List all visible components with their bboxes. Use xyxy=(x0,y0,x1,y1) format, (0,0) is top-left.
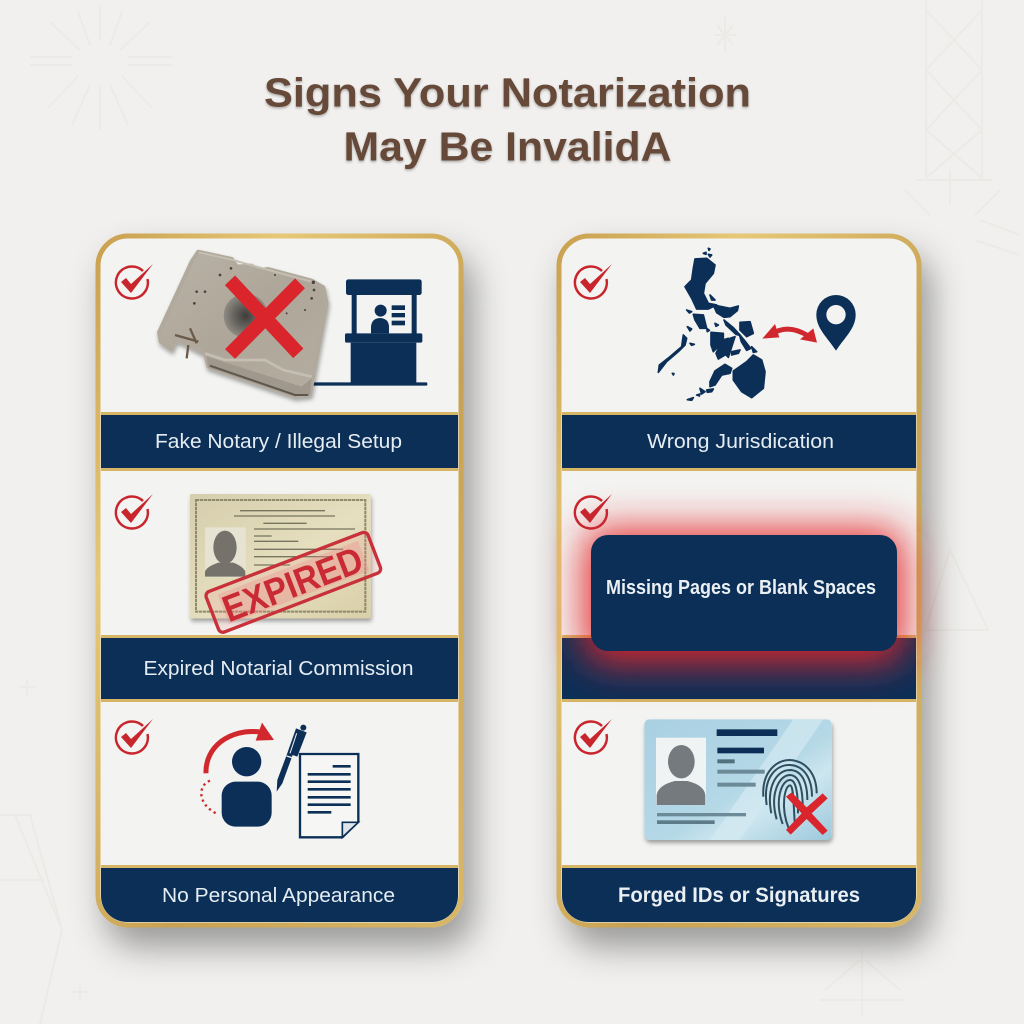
label: expired commission: Expired Notarial Commission xyxy=(144,658,414,680)
icon: Philippines map xyxy=(658,248,765,400)
icon: expired certificate: EXPIRED xyxy=(217,538,369,630)
callout: missing pages: Missing Pages or Blank Spaces xyxy=(606,577,876,599)
panel: left column xyxy=(98,236,461,925)
icon: damaged fake seal with red X xyxy=(159,252,327,397)
icon: expired certificate xyxy=(190,494,382,634)
icon: check mark 5 xyxy=(575,494,612,529)
card label strips xyxy=(562,412,916,922)
red glow behind callout xyxy=(585,530,903,662)
icon: check mark 4 xyxy=(575,264,612,299)
icon: person, pen and document xyxy=(201,723,358,837)
title xyxy=(264,70,751,170)
icon: ID card with forged fingerprint xyxy=(644,719,832,840)
title: Signs Your Notarization xyxy=(264,70,751,116)
icon: notary booth xyxy=(312,279,427,386)
label: forged IDs: Forged IDs or Signatures xyxy=(618,884,860,907)
icon: check mark 1 xyxy=(116,264,153,299)
card label strips xyxy=(101,412,458,922)
icon: check mark 2 xyxy=(116,494,153,529)
icon: check mark 6 xyxy=(575,719,612,754)
icon: check mark 3 xyxy=(116,719,153,754)
card frame xyxy=(559,236,919,925)
title: May Be InvalidA xyxy=(344,124,672,170)
callout: missing pages xyxy=(591,535,897,651)
icon: location pin xyxy=(816,295,856,351)
label: no personal appearance: No Personal Appearance xyxy=(162,885,395,907)
label: wrong jurisdiction: Wrong Jurisdication xyxy=(647,431,834,453)
panel: right column xyxy=(559,236,919,925)
label: fake notary: Fake Notary / Illegal Setup xyxy=(155,431,402,453)
icon: red double arrow xyxy=(762,324,817,343)
card frame xyxy=(98,236,461,925)
